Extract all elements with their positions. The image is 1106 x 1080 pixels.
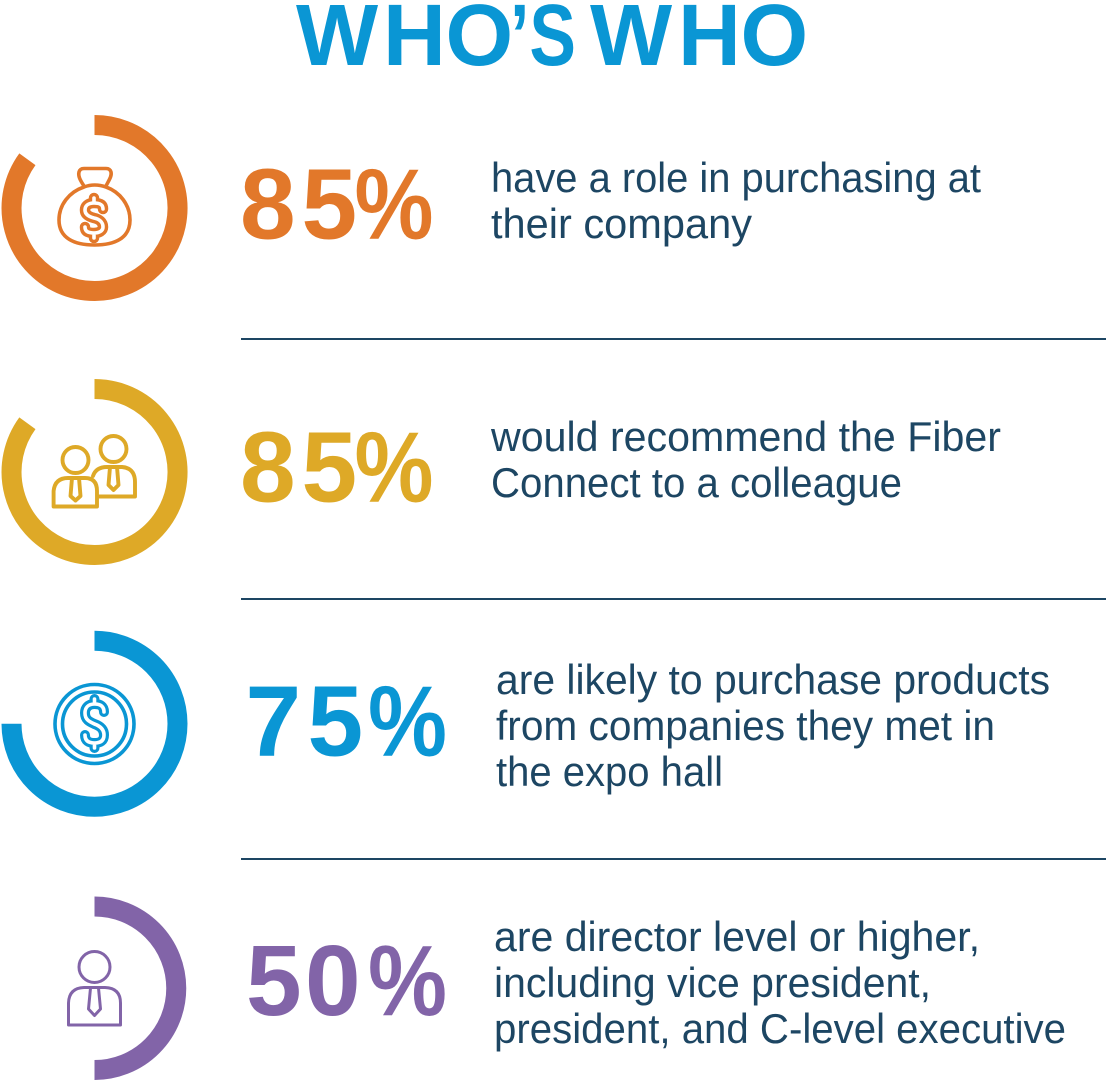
description: expo hall bbox=[496, 656, 1050, 795]
panel: recommendation bbox=[12, 389, 1001, 555]
icon: dollar coin bbox=[55, 684, 134, 764]
donut: 85% gold bbox=[12, 389, 178, 555]
description: purchasing role: have a role in purchasing at bbox=[491, 154, 981, 201]
statistic: 50%: 50 bbox=[246, 925, 364, 1037]
description: seniority bbox=[494, 913, 1066, 1052]
description: recommendation: would recommend the Fiber bbox=[490, 413, 1001, 460]
statistic: 75%: % bbox=[368, 666, 447, 778]
description: recommendation: Connect to a colleague bbox=[491, 459, 902, 506]
description: purchasing role: their company bbox=[491, 200, 752, 247]
description: seniority: including vice president, bbox=[494, 959, 931, 1006]
icon: business person bbox=[68, 952, 120, 1025]
statistic: 85% bbox=[240, 412, 434, 524]
statistic: 85% bbox=[240, 148, 434, 260]
icon: money bag bbox=[59, 168, 130, 245]
icon: two business people bbox=[54, 436, 135, 506]
title bbox=[296, 0, 808, 84]
statistic: 50%: % bbox=[368, 925, 447, 1037]
donut: 50% purple bbox=[94, 906, 176, 1070]
description: expo hall: are likely to purchase products bbox=[496, 656, 1050, 703]
description: recommendation bbox=[490, 413, 1001, 506]
description: expo hall: from companies they met in bbox=[496, 702, 995, 749]
panel: purchasing role bbox=[12, 125, 981, 291]
statistic: 85%: % bbox=[354, 148, 434, 260]
panel: expo hall bbox=[12, 641, 1050, 807]
statistic: 50% bbox=[246, 925, 447, 1037]
statistic: 85%: % bbox=[354, 412, 434, 524]
description: seniority: are director level or higher, bbox=[494, 913, 980, 960]
description: seniority: president, and C-level executive bbox=[494, 1005, 1066, 1052]
description: purchasing role bbox=[491, 154, 981, 247]
statistic: 85%: 85 bbox=[240, 412, 363, 524]
statistic: 85%: 85 bbox=[240, 148, 363, 260]
donut: 75% blue bbox=[12, 641, 177, 807]
panel: seniority bbox=[68, 906, 1066, 1070]
statistic: 75% bbox=[246, 666, 447, 778]
statistic: 75%: 75 bbox=[246, 666, 370, 778]
donut: 85% orange bbox=[12, 125, 178, 291]
description: expo hall: the expo hall bbox=[496, 748, 723, 795]
